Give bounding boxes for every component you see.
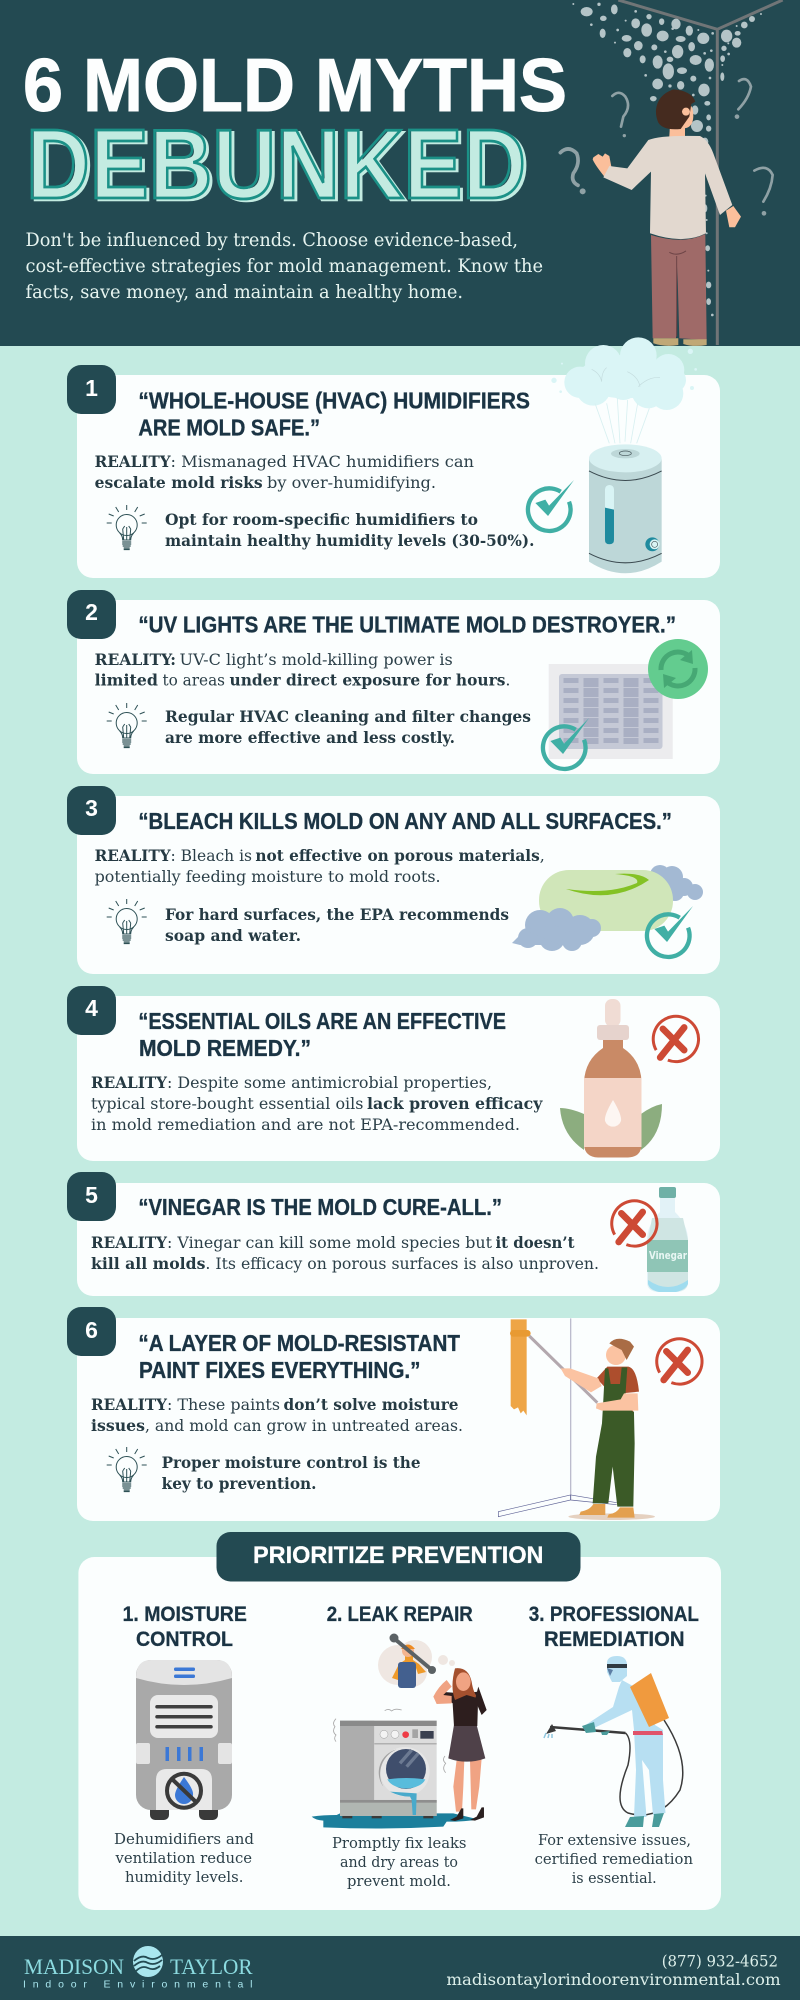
tip text: maintain healthy humidity levels (30-50%). bbox=[165, 531, 534, 550]
reality text: typical store-bought essential oils bbox=[91, 1094, 363, 1113]
tip text: soap and water. bbox=[165, 926, 301, 945]
tip text: Opt for room-specific humidifiers to bbox=[165, 510, 478, 529]
tip text: Proper moisture control is the bbox=[162, 1453, 420, 1472]
icon: light bulb bbox=[107, 1447, 147, 1492]
description bbox=[332, 1834, 466, 1890]
footer band bbox=[0, 1936, 800, 2000]
panel: myth 6 bbox=[67, 1307, 720, 1521]
reality text: REALITY bbox=[91, 1395, 168, 1414]
badge 4: 4 bbox=[85, 995, 98, 1021]
contact details: (877) 932-4652 bbox=[662, 1953, 778, 1971]
illustration: worker in protective suit spraying bbox=[544, 1656, 683, 1827]
heading: “UV LIGHTS ARE THE ULTIMATE MOLD DESTROYER.” bbox=[138, 612, 676, 638]
heading bbox=[138, 1008, 506, 1061]
tip text: key to prevention. bbox=[162, 1474, 316, 1493]
title: debunked: DEBUNKED bbox=[26, 109, 526, 219]
reality text: REALITY: bbox=[95, 650, 176, 669]
illustration: humidifier with cloud bbox=[551, 337, 697, 573]
column: moisture control bbox=[114, 1602, 254, 1886]
heading: ARE MOLD SAFE.” bbox=[138, 415, 320, 441]
reality text: : Mismanaged HVAC humidifiers can bbox=[170, 452, 474, 471]
tip text: For hard surfaces, the EPA recommends bbox=[165, 905, 509, 924]
icon: red x bbox=[653, 1016, 699, 1062]
description: is essential. bbox=[572, 1869, 657, 1887]
illustration: vinegar bottle bbox=[647, 1187, 688, 1292]
reality text: by over-humidifying. bbox=[267, 473, 436, 492]
icon: red x bbox=[612, 1201, 657, 1246]
tip text bbox=[165, 510, 534, 550]
reality text: REALITY bbox=[95, 846, 171, 865]
description: For extensive issues, bbox=[538, 1831, 691, 1849]
panel: myth 3 bbox=[67, 786, 720, 974]
badge 1: 1 bbox=[85, 375, 98, 401]
heading: 3. PROFESSIONAL bbox=[529, 1602, 699, 1626]
heading: “ESSENTIAL OILS ARE AN EFFECTIVE bbox=[138, 1008, 506, 1034]
illustration: woman and leaking washing machine bbox=[312, 1668, 487, 1829]
reality text: to areas bbox=[162, 671, 225, 690]
title: debunked: DEBUNKED bbox=[29, 111, 529, 221]
reality text: potentially feeding moisture to mold roots. bbox=[95, 867, 441, 886]
illustration: soap with foam bbox=[512, 865, 703, 951]
reality text: UV-C light’s mold-killing power is bbox=[180, 650, 453, 669]
illustration: air filter bbox=[549, 664, 673, 759]
heading: 2. LEAK REPAIR bbox=[327, 1602, 473, 1626]
badge 6 bbox=[67, 1307, 116, 1356]
intro text: facts, save money, and maintain a healthy home. bbox=[26, 282, 463, 303]
illustration: person looking at mold in corner bbox=[560, 0, 783, 346]
tip text: are more effective and less costly. bbox=[165, 728, 455, 747]
heading: CONTROL bbox=[136, 1627, 233, 1651]
badge 4 bbox=[67, 986, 116, 1035]
icon: check mark bbox=[647, 906, 693, 957]
panel: prioritize prevention bbox=[78, 1532, 721, 1910]
badge 1 bbox=[67, 365, 116, 414]
reality text bbox=[95, 846, 545, 886]
panel: myth 5 bbox=[67, 1172, 720, 1296]
description: and dry areas to bbox=[340, 1853, 458, 1871]
reality text: REALITY bbox=[95, 452, 171, 471]
badge 5 bbox=[67, 1172, 116, 1221]
panel: myth 4 bbox=[67, 986, 720, 1161]
reality text: limited bbox=[95, 671, 158, 690]
reality text: under direct exposure for hours bbox=[230, 671, 505, 690]
intro text: cost-effective strategies for mold management. Know the bbox=[26, 256, 543, 277]
reality text: REALITY bbox=[91, 1233, 168, 1252]
heading: “VINEGAR IS THE MOLD CURE-ALL.” bbox=[138, 1194, 502, 1220]
heading bbox=[529, 1602, 699, 1651]
description bbox=[535, 1831, 693, 1887]
description: prevent mold. bbox=[347, 1872, 451, 1890]
reality text: REALITY bbox=[91, 1073, 168, 1092]
illustration: dehumidifier bbox=[136, 1660, 232, 1820]
reality text: in mold remediation and are not EPA-recommended. bbox=[91, 1115, 520, 1134]
intro text: Don't be influenced by trends. Choose evidence-based, bbox=[26, 230, 518, 251]
icon: check mark bbox=[528, 480, 574, 531]
intro text bbox=[26, 230, 543, 303]
description: certified remediation bbox=[535, 1850, 693, 1868]
icon: light bulb bbox=[107, 899, 147, 944]
panel: myth 2 bbox=[67, 590, 720, 774]
description: ventilation reduce bbox=[115, 1849, 252, 1867]
badge 3: 3 bbox=[85, 795, 98, 821]
illustration: essential oil bottle bbox=[560, 999, 662, 1158]
badge 2 bbox=[67, 590, 116, 639]
contact details bbox=[446, 1953, 781, 1989]
heading: PAINT FIXES EVERYTHING.” bbox=[139, 1357, 420, 1383]
icon: red x bbox=[657, 1339, 702, 1384]
reality text: escalate mold risks bbox=[95, 473, 263, 492]
question marks bbox=[560, 79, 773, 202]
heading bbox=[123, 1602, 247, 1651]
reality text bbox=[91, 1073, 543, 1134]
reality text bbox=[91, 1395, 463, 1435]
badge 6: 6 bbox=[85, 1317, 98, 1343]
badge 3 bbox=[67, 786, 116, 835]
logo: Indoor Environmental bbox=[23, 1978, 252, 1990]
icon: light bulb bbox=[107, 505, 147, 550]
title: 6 mold myths: 6 MOLD MYTHS bbox=[23, 43, 567, 127]
badge 2: 2 bbox=[85, 599, 98, 625]
column: leak repair bbox=[312, 1602, 487, 1890]
illustration: painter at wall bbox=[498, 1318, 655, 1520]
reality text bbox=[95, 452, 474, 492]
reality text bbox=[91, 1233, 599, 1273]
icon: check mark bbox=[543, 718, 589, 769]
heading: “WHOLE-HOUSE (HVAC) HUMIDIFIERS bbox=[138, 387, 530, 413]
heading: REMEDIATION bbox=[544, 1627, 684, 1651]
icon: light bulb bbox=[107, 703, 147, 748]
tip text bbox=[165, 905, 509, 945]
description bbox=[114, 1830, 254, 1886]
header band bbox=[0, 0, 800, 346]
tip text bbox=[162, 1453, 420, 1493]
heading: 1. MOISTURE bbox=[123, 1602, 247, 1626]
badge 5: 5 bbox=[85, 1182, 98, 1208]
reality text: : Despite some antimicrobial properties, bbox=[167, 1073, 492, 1092]
reality text: : These paints bbox=[167, 1395, 280, 1414]
description: Promptly fix leaks bbox=[332, 1834, 466, 1852]
reality text: : Bleach is bbox=[170, 846, 252, 865]
contact details: madisontaylorindoorenvironmental.com bbox=[446, 1971, 781, 1989]
reality text: not effective on porous materials bbox=[255, 846, 540, 865]
reality text: lack proven efficacy bbox=[367, 1094, 543, 1113]
reality text: issues bbox=[91, 1416, 145, 1435]
tip text bbox=[165, 707, 531, 747]
icon: green refresh circle bbox=[648, 639, 708, 699]
illustration: plumber thought bubble bbox=[378, 1634, 455, 1688]
reality text: . bbox=[505, 671, 510, 690]
heading pill: PRIORITIZE PREVENTION bbox=[253, 1542, 544, 1569]
reality text: . Its efficacy on porous surfaces is also unproven. bbox=[205, 1254, 599, 1273]
logo: TAYLOR bbox=[170, 1954, 253, 1979]
logo: MADISON bbox=[24, 1954, 124, 1979]
column: professional remediation bbox=[529, 1602, 699, 1887]
reality text bbox=[95, 650, 510, 690]
description: humidity levels. bbox=[125, 1868, 243, 1886]
reality text: don’t solve moisture bbox=[284, 1395, 458, 1414]
description: Dehumidifiers and bbox=[114, 1830, 254, 1848]
heading bbox=[138, 1330, 460, 1383]
heading: “BLEACH KILLS MOLD ON ANY AND ALL SURFACES.” bbox=[138, 808, 672, 834]
reality text: it doesn’t bbox=[496, 1233, 575, 1252]
heading: MOLD REMEDY.” bbox=[139, 1035, 311, 1061]
tip text: Regular HVAC cleaning and filter changes bbox=[165, 707, 531, 726]
heading bbox=[138, 387, 530, 441]
reality text: kill all molds bbox=[91, 1254, 205, 1273]
panel: myth 1 bbox=[67, 337, 720, 578]
heading pill bbox=[216, 1532, 580, 1582]
reality text: : Vinegar can kill some mold species but bbox=[167, 1233, 493, 1252]
bottle label: Vinegar bbox=[649, 1249, 687, 1262]
logo bbox=[23, 1946, 253, 1990]
reality text: , bbox=[540, 846, 545, 865]
heading: “A LAYER OF MOLD-RESISTANT bbox=[138, 1330, 460, 1356]
reality text: , and mold can grow in untreated areas. bbox=[145, 1416, 463, 1435]
